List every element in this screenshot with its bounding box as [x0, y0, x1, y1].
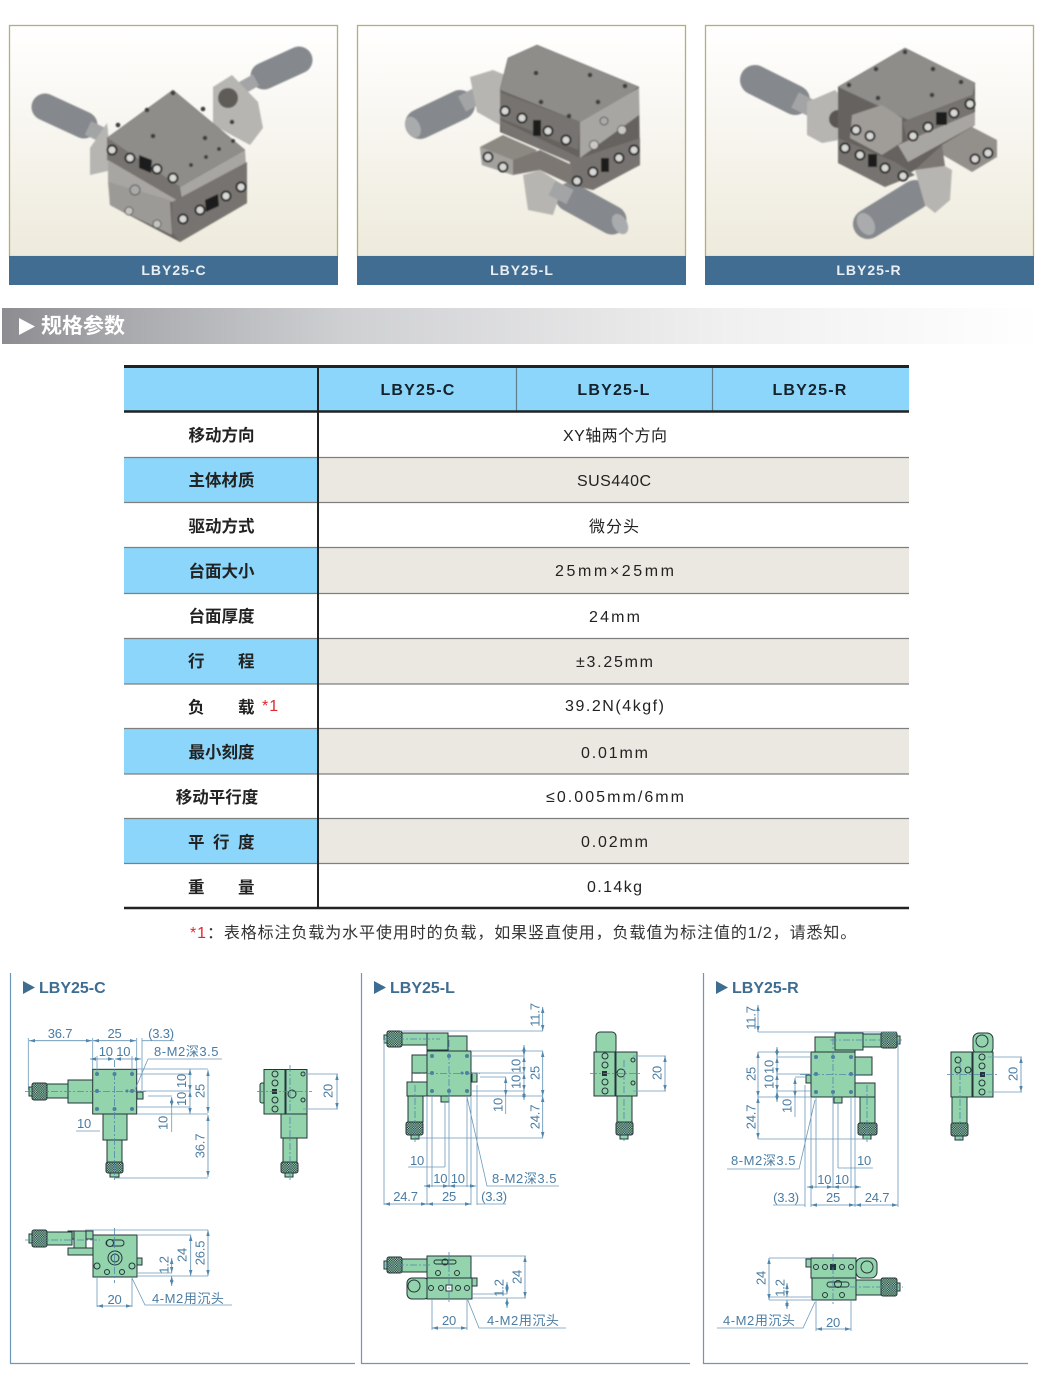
row: 最小刻度: 最小刻度: [188, 742, 255, 762]
dimension: side 20: 20: [650, 1066, 665, 1080]
row: 移动方向: [188, 425, 667, 445]
row: 行程: 程: [238, 652, 254, 671]
dimensions: top view: (3.3): [481, 1189, 507, 1204]
row: 重量: 重: [188, 878, 204, 897]
row: 负载: 载: [238, 698, 255, 717]
row: 台面大小: 台面大小: [188, 561, 255, 581]
photo: LBY25-L stage: [402, 45, 640, 237]
dimensions: top view: 10: [77, 1116, 91, 1131]
table header row: LBY25-R: [772, 382, 848, 399]
heading: LBY25-L: LBY25-L: [390, 980, 455, 997]
product card: LBY25-L: [357, 26, 686, 285]
dimensions: top view: 10: [762, 1060, 777, 1074]
panel: LBY25-C drawings: [10, 973, 355, 1364]
row: 主体材质: SUS440C: [577, 473, 651, 490]
heading: LBY25-C: LBY25-C: [39, 980, 106, 997]
section heading bar: 规格参数: [2, 308, 1041, 344]
photo: LBY25-C stage: [45, 60, 299, 242]
dimensions: top view: 10 10: [99, 1044, 130, 1059]
row: 移动方向: XY轴两个方向: [563, 427, 667, 445]
dimensions: top view: 25: [528, 1066, 543, 1080]
row: 重量: 量: [238, 878, 254, 897]
row: 主体材质: [188, 470, 651, 490]
row: 移动平行度: ≤0.005mm/6mm: [546, 789, 684, 806]
row: 行程: [188, 652, 653, 671]
dimensions: top view: (3.3): [148, 1026, 174, 1041]
dimension: side 20: [633, 1056, 666, 1091]
dimensions: top view: 10: [174, 1092, 189, 1106]
dimensions: top view: 10: [780, 1099, 795, 1113]
row: 负载: [188, 698, 664, 717]
dimensions: front view: 4-M2用沉头: [152, 1291, 224, 1306]
drawing: top view: [25, 1060, 146, 1180]
row: 驱动方式: 微分头: [589, 518, 639, 536]
dimensions: top view: 36.7: [48, 1026, 72, 1041]
dimensions: top view: 10: [857, 1153, 871, 1168]
dimensions: top view: 11.7: [528, 1003, 543, 1027]
row: 台面大小: 25mm×25mm: [555, 563, 674, 580]
dimensions: top view: 8-M2深3.5: [731, 1153, 796, 1168]
dimensions: top view: 10: [509, 1059, 524, 1073]
dimension: side 20: 20: [1006, 1067, 1021, 1081]
dimension: side 20: [303, 1074, 338, 1109]
drawing: side view: [257, 1065, 312, 1180]
dimensions: front view: 24: [754, 1271, 769, 1285]
dimensions: front view: 20: [826, 1315, 840, 1330]
row: 台面厚度: 24mm: [589, 609, 640, 626]
table header row: LBY25-L: [577, 382, 651, 399]
row: 平行度: 度: [238, 833, 255, 852]
row: 最小刻度: 0.01mm: [581, 745, 648, 762]
row: 驱动方式: [188, 516, 639, 536]
drawing: front view: [806, 1254, 903, 1304]
dimensions: front view: 20: [442, 1313, 456, 1328]
dimensions: front view: [432, 1256, 566, 1330]
dimensions: top view: 10: [762, 1075, 777, 1089]
row: 台面厚度: [188, 606, 640, 626]
dimensions: top view: (3.3): [773, 1190, 799, 1205]
dimensions: top view: 25: [193, 1084, 208, 1098]
row: 行程: ±3.25mm: [576, 654, 653, 671]
row: 负载: 39.2N(4kgf): [565, 698, 664, 715]
dimensions: top view: [727, 1005, 898, 1207]
row: 移动平行度: [176, 788, 684, 807]
dimensions: top view: 25: [442, 1189, 456, 1204]
specification table: [124, 366, 909, 908]
photo: LBY25-R stage: [755, 48, 997, 238]
dimensions: top view: 24.7: [865, 1190, 889, 1205]
row: 驱动方式: 驱动方式: [188, 516, 255, 536]
product card: LBY25-R: [705, 26, 1034, 285]
dimensions: top view: 24.7: [393, 1189, 418, 1204]
dimensions: top view: 11.7: [744, 1006, 759, 1030]
row: 主体材质: 主体材质: [188, 470, 254, 490]
dimensions: top view: 10: [410, 1153, 424, 1168]
dimensions: front view: [85, 1230, 232, 1307]
dimensions: front view: 1.2: [157, 1256, 172, 1274]
drawing: top view: [800, 1032, 902, 1142]
caption: LBY25-C: [9, 256, 338, 285]
caption: LBY25-R: LBY25-R: [836, 262, 902, 278]
row: 平行度: 0.02mm: [581, 834, 648, 851]
table header row: LBY25-C: [380, 382, 456, 399]
dimensions: front view: 24: [175, 1248, 190, 1262]
row: 平行度: 平: [188, 834, 204, 852]
row: 重量: 0.14kg: [587, 879, 642, 896]
dimensions: front view: [717, 1258, 851, 1331]
table header row: [124, 367, 909, 411]
dimensions: top view: 25: [107, 1026, 122, 1041]
product card: LBY25-C: [9, 26, 338, 285]
dimensions: front view: 26.5: [193, 1241, 208, 1265]
row: 负载: *1: [262, 698, 279, 715]
row: 台面厚度: 台面厚度: [188, 606, 255, 626]
panel: LBY25-L drawings: [362, 973, 690, 1364]
drawing: front view: [25, 1228, 142, 1283]
heading: LBY25-R: LBY25-R: [732, 980, 799, 997]
dimensions: top view: [28, 1026, 222, 1178]
row: 重量: [188, 878, 642, 897]
dimensions: top view: 10: [509, 1075, 524, 1089]
row: 移动方向: 移动方向: [188, 425, 254, 445]
dimensions: front view: 20: [107, 1292, 122, 1307]
dimensions: front view: 1.2: [492, 1279, 507, 1297]
dimension: side 20: 20: [321, 1084, 336, 1098]
dimensions: top view: 10 10: [433, 1171, 465, 1186]
drawing: top view: [384, 1031, 480, 1142]
caption: LBY25-R: [705, 256, 1034, 285]
drawing: side view: [947, 1033, 998, 1141]
dimensions: top view: 8-M2深3.5: [154, 1044, 219, 1059]
dimensions: top view: 10: [156, 1116, 171, 1130]
row: 平行度: 行: [213, 833, 230, 852]
dimensions: top view: 10: [491, 1098, 506, 1112]
drawing: side view: [590, 1032, 642, 1141]
dimensions: top view: 24.7: [744, 1105, 759, 1129]
caption: LBY25-L: [357, 256, 686, 285]
dimension: side 20: [988, 1057, 1022, 1092]
row: 台面大小: [188, 561, 674, 581]
drawing: front view: [384, 1252, 477, 1303]
dimensions: top view: 25: [744, 1067, 759, 1081]
dimensions: top view: 25: [826, 1190, 840, 1205]
row: 平行度: [188, 833, 648, 852]
section heading bar: 规格参数: 规格参数: [41, 314, 125, 338]
dimensions: top view: 10: [174, 1074, 189, 1088]
dimensions: top view: 24.7: [528, 1105, 543, 1129]
dimensions: front view: 4-M2用沉头: [487, 1313, 559, 1328]
row: 行程: 行: [188, 652, 204, 671]
caption: LBY25-C: LBY25-C: [141, 262, 207, 278]
dimensions: front view: 4-M2用沉头: [723, 1313, 795, 1328]
table footnote: *1：表格标注负载为水平使用时的负载，如果竖直使用，负载值为标注值的1/2，请悉知。: [190, 924, 857, 942]
dimensions: top view: 8-M2深3.5: [492, 1171, 557, 1186]
panel: LBY25-R drawings: [704, 973, 1028, 1364]
row: 最小刻度: [188, 742, 648, 762]
dimensions: top view: [384, 1003, 559, 1205]
dimensions: front view: 24: [510, 1270, 525, 1284]
row: 移动平行度: 移动平行度: [176, 788, 259, 807]
dimensions: top view: 10 10: [817, 1172, 849, 1187]
dimensions: front view: 1.2: [773, 1279, 788, 1297]
caption: LBY25-L: LBY25-L: [490, 262, 554, 278]
row: 负载: 负: [188, 698, 204, 717]
dimensions: top view: 36.7: [193, 1134, 208, 1158]
